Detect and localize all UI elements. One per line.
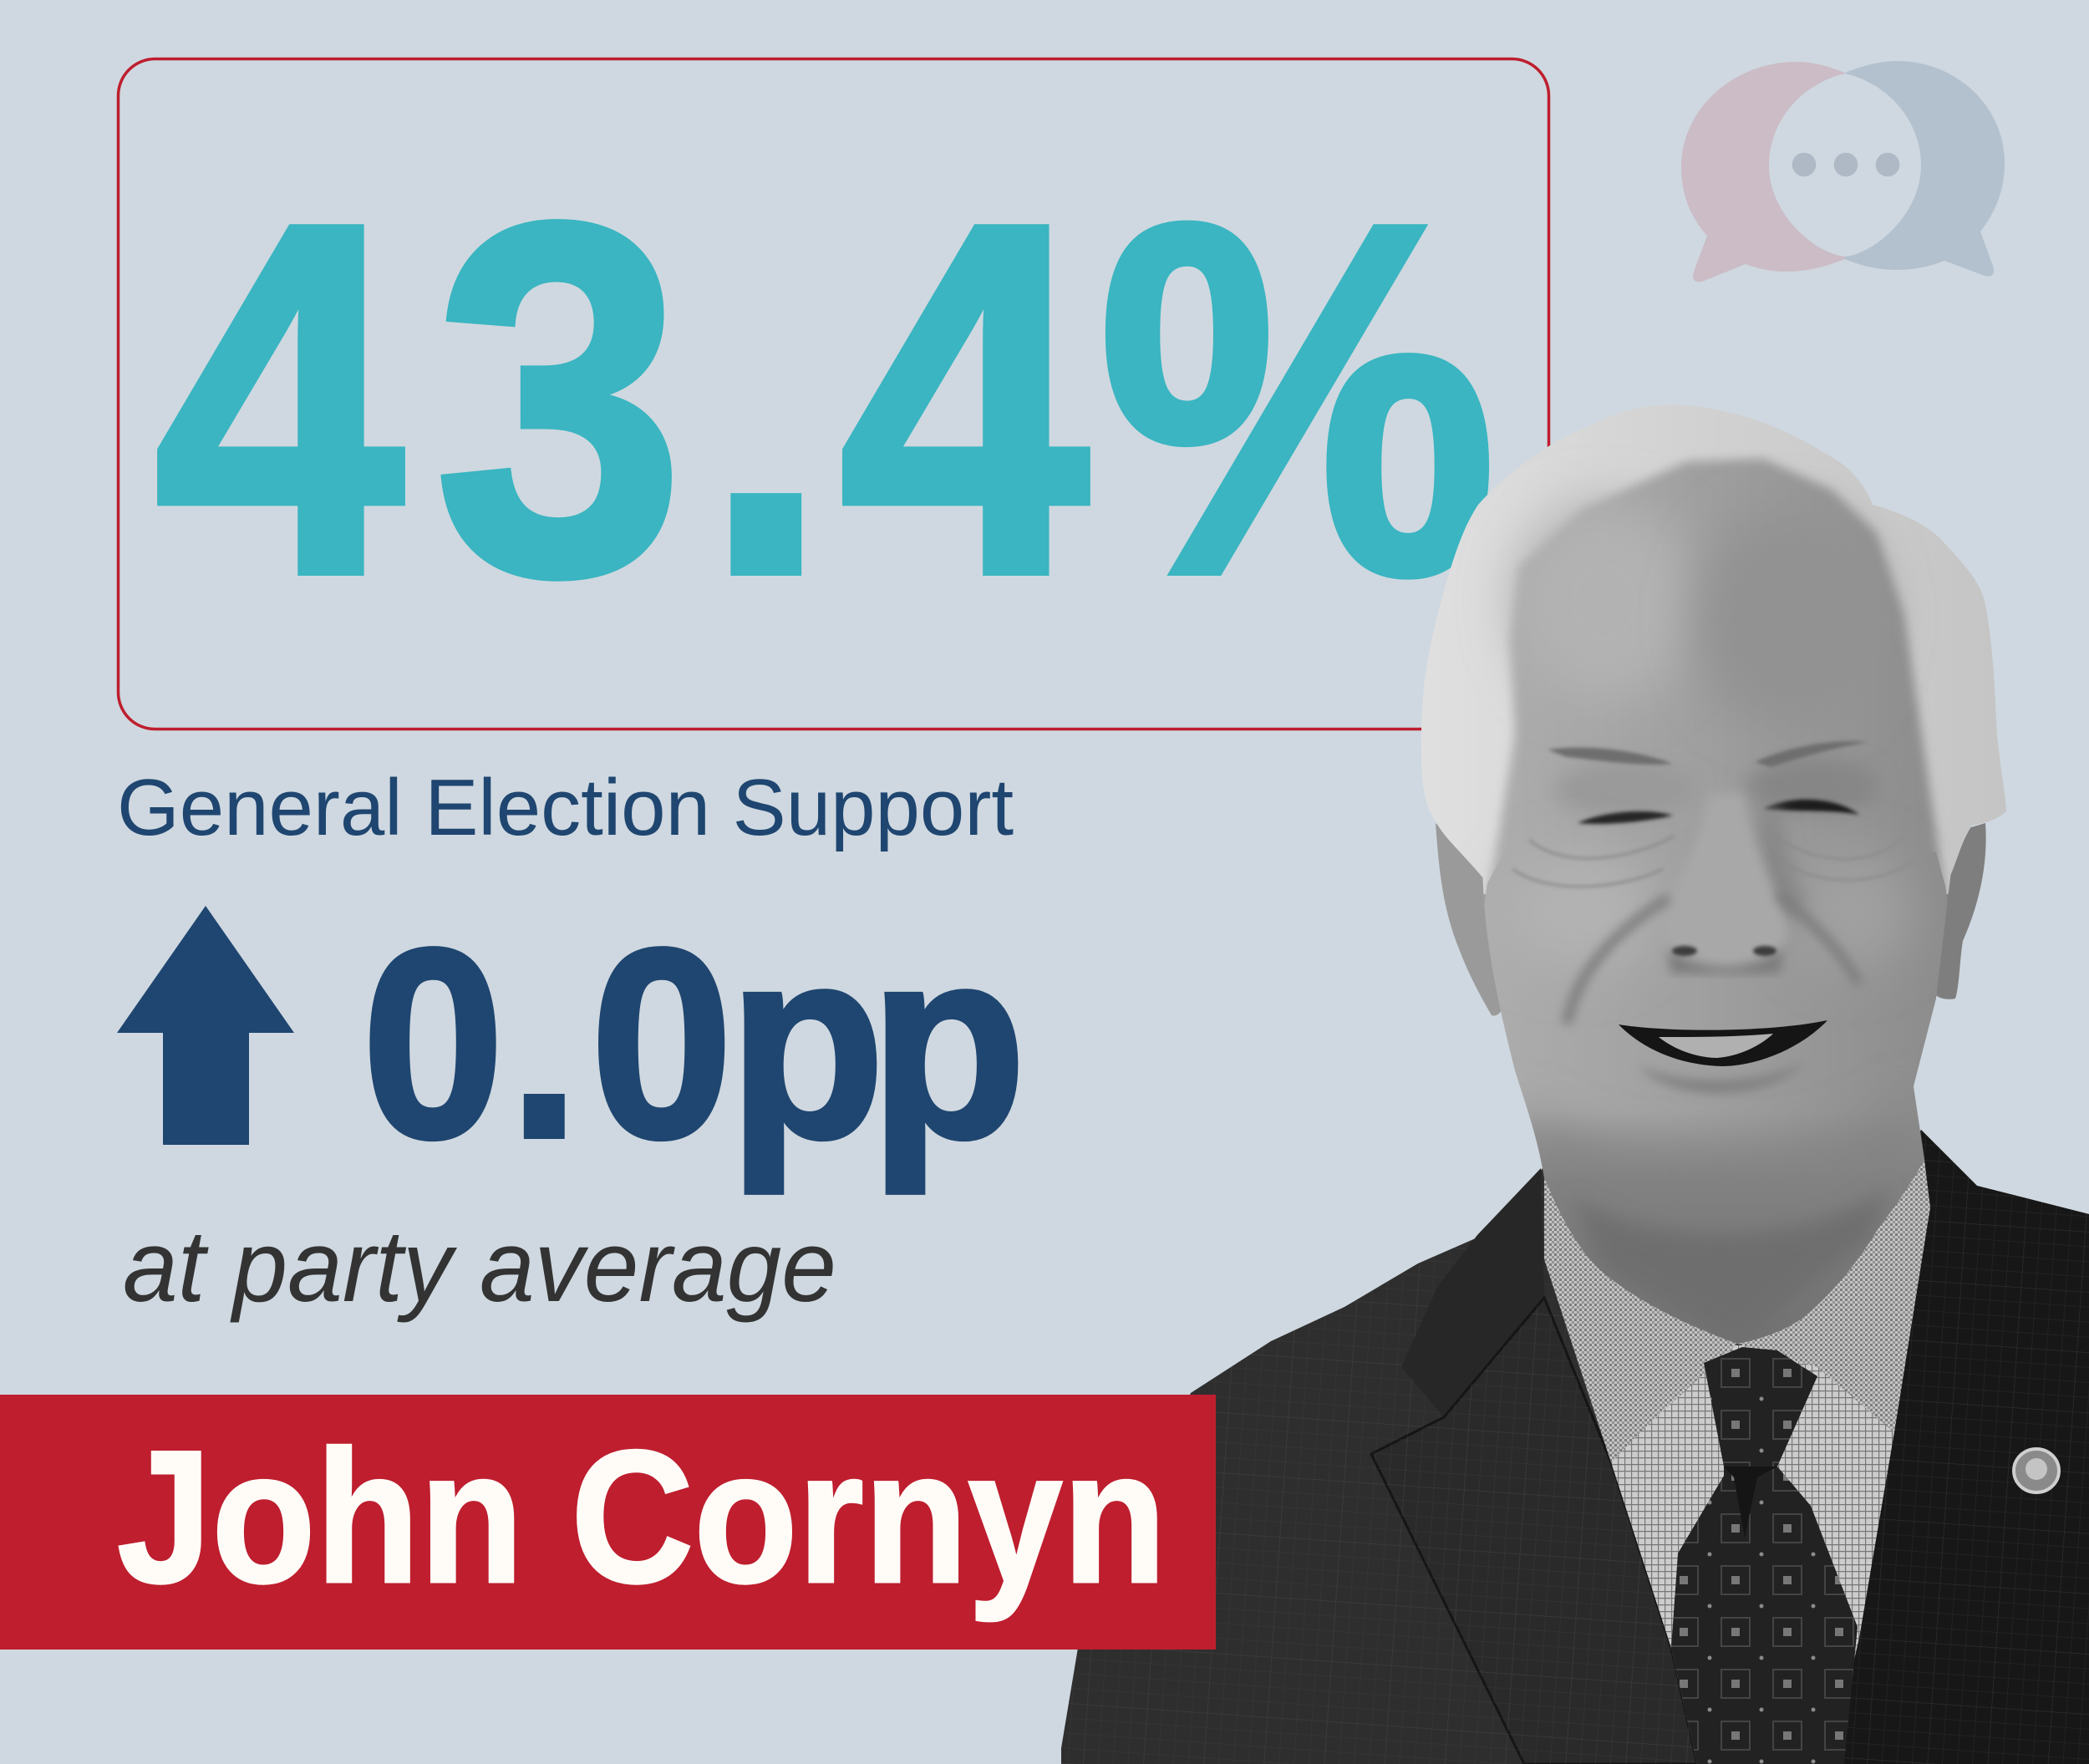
left brow — [1548, 747, 1673, 765]
lower lip shade — [1638, 1061, 1805, 1093]
change value: 0.0pp — [362, 893, 1026, 1195]
chin shadow — [1527, 1108, 1920, 1167]
lapel pin — [2014, 1449, 2059, 1492]
centre overlap — [1769, 74, 1921, 257]
left eye socket — [1560, 767, 1663, 812]
forehead shadow — [1686, 546, 1775, 690]
left ear — [1436, 823, 1505, 1015]
right eye socket — [1746, 757, 1880, 814]
mouth — [1619, 1020, 1827, 1066]
right eye — [1764, 800, 1859, 815]
nose — [1663, 794, 1787, 968]
nose side shadow — [1761, 802, 1805, 928]
right collar — [1737, 1160, 1930, 1432]
jacket plaid — [1061, 1130, 2089, 1764]
right blue bubble — [1845, 61, 2005, 277]
left eye — [1578, 811, 1673, 824]
metric label: General Election Support — [117, 763, 1014, 852]
lower face and neck — [1471, 852, 1959, 1354]
left cheek — [1541, 866, 1646, 954]
tie — [1671, 1347, 1858, 1764]
right cheek — [1820, 864, 1906, 958]
name banner — [0, 1395, 1216, 1650]
candidate name: John Cornyn — [117, 1411, 1166, 1622]
up arrow — [117, 906, 294, 1145]
stat box outline — [119, 58, 1549, 729]
right ear — [1935, 823, 1986, 999]
smile folds — [1567, 893, 1859, 1024]
shirt — [1611, 1345, 1894, 1764]
tie knot shadow — [1724, 1467, 1777, 1538]
neck shade — [1536, 1136, 1924, 1344]
typing dots — [1792, 153, 1899, 176]
teeth — [1659, 1034, 1773, 1058]
lower lapel — [1371, 1298, 1697, 1764]
upper lapel — [1401, 1168, 1544, 1417]
jacket — [1061, 1130, 2089, 1764]
portrait — [1061, 393, 2089, 1764]
change caption: at party average — [123, 1209, 836, 1323]
hair mass — [1412, 393, 2014, 894]
lower lapel plaid — [1371, 1298, 1697, 1764]
under jaw shadow — [1584, 1200, 1880, 1297]
pin centre — [2025, 1458, 2047, 1480]
nostrils — [1672, 946, 1776, 956]
forehead highlight — [1512, 501, 1696, 702]
eye wrinkles — [1512, 836, 1914, 887]
big percentage: 43.4% — [155, 121, 1497, 678]
jacket right side shade — [1830, 1130, 2089, 1764]
under nose shadow — [1667, 948, 1784, 974]
chat bubbles icon — [1681, 61, 2005, 282]
forehead and upper face — [1487, 459, 1945, 902]
right brow — [1755, 741, 1868, 767]
pin ring — [2014, 1449, 2059, 1492]
left collar — [1544, 1170, 1737, 1462]
left pink bubble — [1681, 62, 1845, 282]
head group — [1412, 393, 2014, 1354]
